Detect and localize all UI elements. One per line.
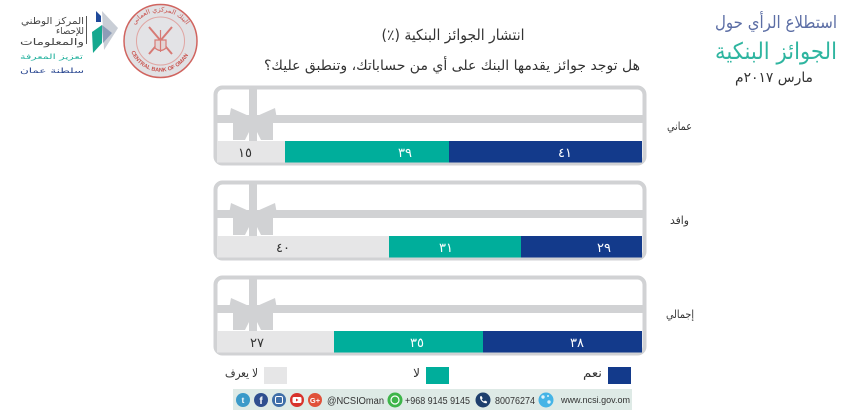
stacked bar: Expatriate: ٤٠ xyxy=(276,241,290,256)
legend xyxy=(225,366,631,384)
icon: twitter xyxy=(236,393,250,407)
legend: no: لا xyxy=(413,366,420,380)
stacked bar: Omani xyxy=(217,141,642,162)
chart title: انتشار الجوائز البنكية (٪) xyxy=(382,26,524,44)
icon: facebook: f xyxy=(259,396,263,407)
icon: facebook xyxy=(254,393,268,407)
website: www.ncsi.gov.om xyxy=(560,395,630,406)
stacked bar: Omani: ١٥ xyxy=(238,146,252,161)
survey heading: استطلاع الرأي حول xyxy=(715,11,837,33)
logo: Central Bank of Oman seal: البنك المركزي العماني xyxy=(134,6,190,25)
legend: don't know: لا يعرف xyxy=(225,366,258,381)
row: Omani xyxy=(215,88,692,164)
stacked bar: Omani: ٤١ xyxy=(558,146,572,161)
icon: gift box xyxy=(215,88,645,164)
organisation name: للإحصاء xyxy=(56,26,84,37)
row: Total xyxy=(215,278,694,354)
stacked bar: Expatriate: ٢٩ xyxy=(597,241,611,256)
organisation name: المركز الوطني xyxy=(21,16,84,27)
icon: gift box xyxy=(215,278,645,354)
organisation name: والمعلومات xyxy=(20,37,84,48)
stacked bar: Omani: ٣٩ xyxy=(398,146,412,161)
stacked bar: Total xyxy=(217,331,642,352)
stacked bar: Total: ٢٧ xyxy=(250,336,264,351)
icon: google plus: G+ xyxy=(310,396,321,405)
logo mark xyxy=(92,11,118,53)
row label: وافد xyxy=(670,214,689,227)
country: سلطنة عمان xyxy=(20,67,84,75)
icon: instagram xyxy=(272,393,286,407)
tagline: تعزيز المعرفة xyxy=(20,53,83,61)
row label: إجمالي xyxy=(666,308,694,321)
logo: Central Bank of Oman seal xyxy=(123,4,198,78)
icon: google plus xyxy=(308,393,322,407)
phone number: +968 9145 9145 xyxy=(405,396,470,407)
legend: yes xyxy=(583,366,631,384)
row: Expatriate xyxy=(215,182,689,258)
social handle: @NCSIOman xyxy=(327,396,384,407)
stacked bar: Expatriate: ٣١ xyxy=(439,241,453,256)
row label: عماني xyxy=(667,120,692,133)
icon: youtube xyxy=(290,393,304,407)
stacked bar: Total: ٣٨ xyxy=(570,336,584,351)
legend: no xyxy=(413,366,449,384)
legend: yes: نعم xyxy=(583,366,602,380)
stacked bar: Expatriate xyxy=(217,236,642,258)
toll-free number: 80076274 xyxy=(495,396,535,407)
icon: globe xyxy=(538,392,554,408)
icon: twitter: t xyxy=(242,396,245,405)
icon: phone xyxy=(476,392,490,408)
stacked bar: Total: ٣٥ xyxy=(410,336,424,351)
icon: whatsapp xyxy=(388,392,402,408)
organisation name xyxy=(20,16,84,48)
topic heading: الجوائز البنكية xyxy=(715,39,837,65)
logo divider xyxy=(86,16,87,44)
contact footer strip xyxy=(233,389,632,410)
title block: survey name and date xyxy=(715,11,837,86)
legend: don't know xyxy=(225,366,287,384)
logo: Central Bank of Oman seal: CENTRAL BANK OF OMAN xyxy=(132,50,188,72)
icon: gift box xyxy=(215,182,645,258)
date: مارس ٢٠١٧م xyxy=(735,70,813,86)
survey question: هل توجد جوائز يقدمها البنك على أي من حساباتك، وتنطبق عليك؟ xyxy=(264,56,640,74)
logo: NCSI xyxy=(20,11,118,75)
